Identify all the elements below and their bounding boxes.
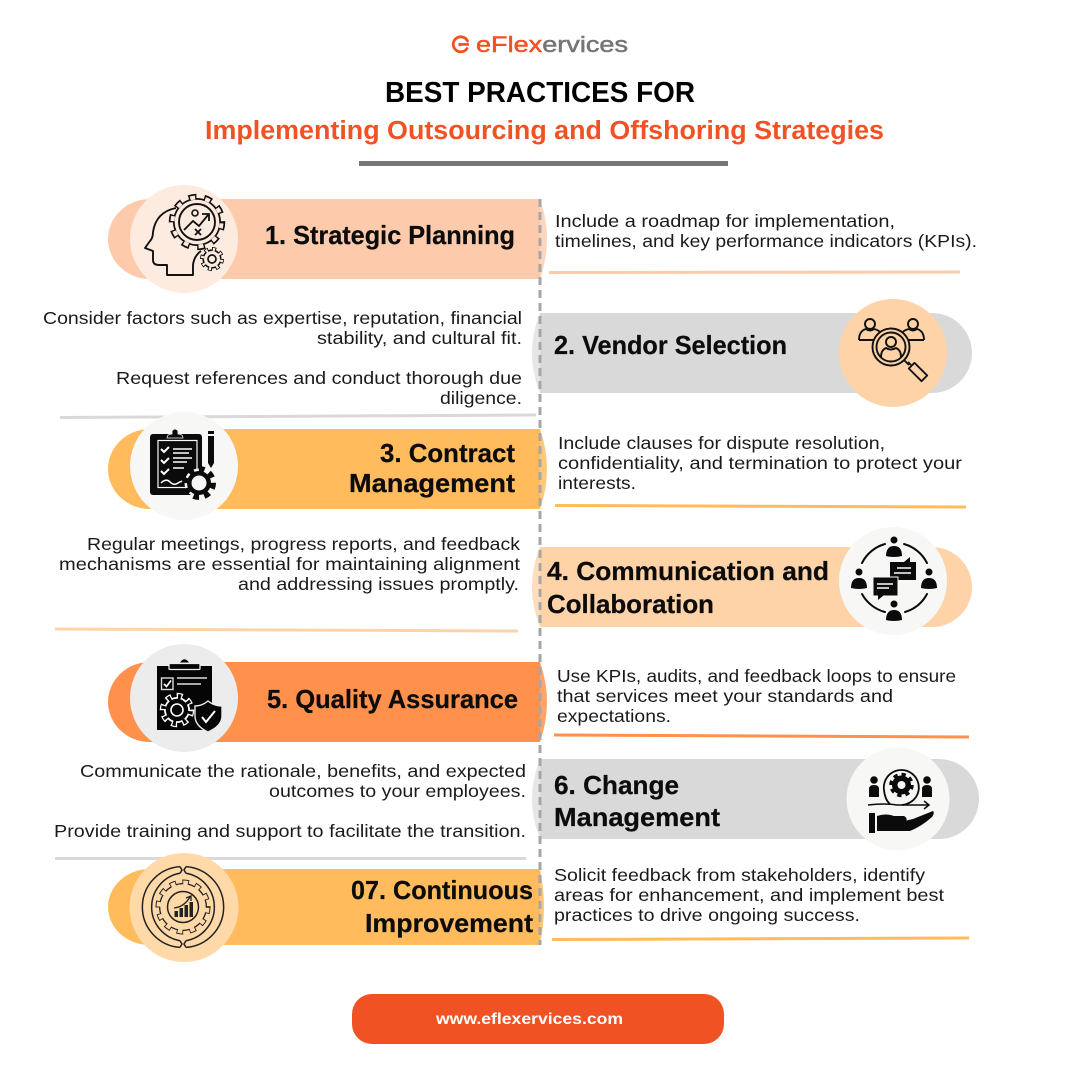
bar 5 (108, 662, 547, 742)
heading 4 (547, 556, 829, 619)
heading 1: 1. Strategic Planning (265, 220, 515, 250)
description 4: and addressing issues promptly. (238, 574, 519, 594)
description 6: Provide training and support to facilitate the transition. (54, 821, 526, 841)
panel: 07. Continuous Improvement (108, 853, 969, 962)
description 6 (54, 761, 526, 841)
panel: 5. Quality Assurance (108, 644, 969, 752)
description 5: that services meet your standards and (557, 686, 893, 706)
heading 7 (351, 875, 533, 938)
description 5: Use KPIs, audits, and feedback loops to ensure (557, 666, 956, 686)
panel: 3. Contract Management (108, 412, 966, 520)
description 3: confidentiality, and termination to protect your (558, 453, 962, 473)
description 4 (59, 534, 520, 594)
bar 3 (108, 429, 547, 509)
description 7: practices to drive ongoing success. (554, 905, 860, 925)
heading 3 (349, 438, 515, 498)
description 5: expectations. (557, 706, 671, 726)
bar 4 (532, 547, 972, 627)
bar 1 (108, 199, 547, 279)
heading 6 (554, 770, 720, 832)
bar 2 (532, 313, 972, 393)
heading 4: 4. Communication and (547, 556, 829, 586)
footer button (352, 994, 724, 1044)
description 2: stability, and cultural fit. (317, 328, 522, 348)
description 3: interests. (558, 473, 636, 493)
heading 3: Management (349, 468, 515, 498)
panel: 6. Change Management (54, 748, 979, 858)
description 1: timelines, and key performance indicators (KPIs). (555, 231, 977, 251)
bar 7 (108, 869, 544, 945)
description 3 (558, 433, 962, 493)
heading 6: 6. Change (554, 770, 679, 800)
heading 7: 07. Continuous (351, 875, 533, 905)
heading 6: Management (554, 802, 720, 832)
icon: people around chat bubbles (839, 527, 947, 635)
subtitle: Implementing Outsourcing and Offshoring Strategies (205, 117, 884, 145)
footer button: www.eflexervices.com (435, 1011, 623, 1028)
panel: 4. Communication and Collaboration (55, 527, 972, 635)
heading 5: 5. Quality Assurance (267, 684, 518, 714)
description 2: Consider factors such as expertise, reputation, financial (43, 308, 522, 328)
heading 7: Improvement (365, 908, 533, 938)
description 2: Request references and conduct thorough due (116, 368, 522, 388)
description 2 (43, 308, 522, 408)
heading 4: Collaboration (547, 589, 714, 619)
logo: eFlex ervices (476, 32, 628, 57)
bar 6 (532, 759, 979, 839)
icon: head with strategy gear (130, 185, 238, 293)
icon: improvement cycle gear with chart (130, 853, 238, 962)
description 7: areas for enhancement, and implement best (554, 885, 944, 905)
description 5 (557, 666, 956, 726)
icon: clipboard checklist with gear and pencil (130, 412, 238, 520)
description 3: Include clauses for dispute resolution, (558, 433, 885, 453)
description 6: Communicate the rationale, benefits, and expected (80, 761, 526, 781)
icon: quality clipboard with gear and shield (130, 644, 238, 752)
description 1 (555, 211, 977, 251)
heading 2: 2. Vendor Selection (554, 330, 787, 360)
description 4: mechanisms are essential for maintaining alignment (59, 554, 520, 574)
description 6: outcomes to your employees. (269, 781, 526, 801)
icon: people and magnifier (839, 299, 947, 407)
icon: hand with gear and people (846, 748, 950, 850)
description 1: Include a roadmap for implementation, (555, 211, 895, 231)
heading 3: 3. Contract (380, 438, 515, 468)
description 7: Solicit feedback from stakeholders, identify (554, 865, 925, 885)
description 4: Regular meetings, progress reports, and feedback (87, 534, 520, 554)
panel: 2. Vendor Selection (43, 299, 972, 418)
panel: 1. Strategic Planning (108, 185, 977, 293)
description 7 (554, 865, 944, 925)
description 2: diligence. (440, 388, 522, 408)
title: BEST PRACTICES FOR (385, 77, 695, 109)
title divider (359, 161, 728, 166)
central dashed timeline (538, 199, 542, 945)
